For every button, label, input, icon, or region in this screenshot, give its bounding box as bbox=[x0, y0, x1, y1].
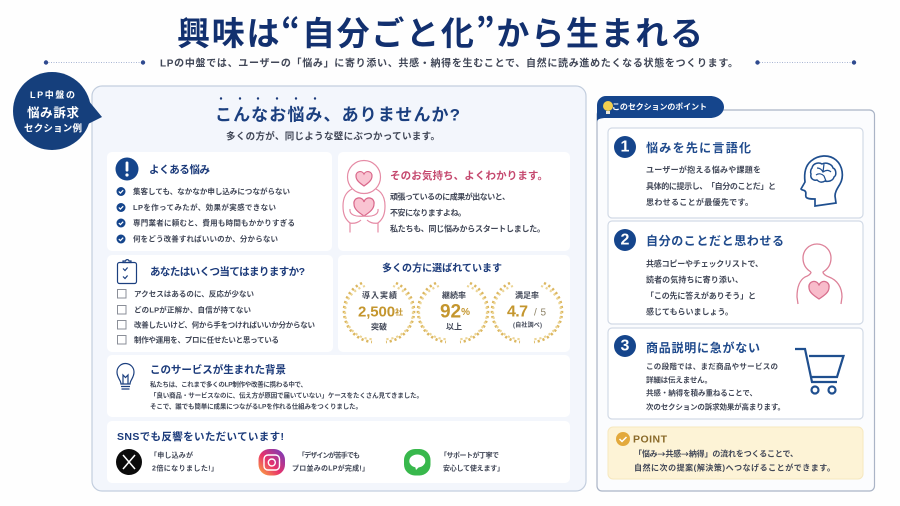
checklist: LPを作ってみたが、効果が実感できない bbox=[133, 202, 276, 212]
text 2: 感じてもらいましょう。 bbox=[646, 306, 733, 316]
icon: Instagram bbox=[258, 449, 285, 476]
number 1: 1 bbox=[621, 138, 630, 156]
icon: person with heart bbox=[797, 244, 842, 304]
checklist: 何をどう改善すればいいのか、分からない bbox=[133, 234, 278, 244]
number 3 bbox=[614, 335, 636, 357]
POINT label: POINT bbox=[633, 434, 668, 446]
heading: empathy: そのお気持ち、よくわかります。 bbox=[390, 169, 548, 182]
quote: X: 「申し込みが bbox=[150, 450, 193, 460]
quote: LINE: 「サポートが丁寧で bbox=[440, 450, 499, 460]
heading: SNS reactions: SNSでも反響をいただいています! bbox=[117, 430, 284, 443]
point card 1 bbox=[608, 128, 863, 218]
text: empathy body: 頑張っているのに成果が出ないと、 bbox=[390, 192, 510, 202]
card: common worries bbox=[107, 152, 332, 251]
badge: section example: LP中盤の bbox=[30, 89, 75, 100]
quote: X bbox=[150, 450, 218, 472]
text 1 bbox=[646, 164, 776, 207]
checkbox list bbox=[118, 288, 316, 344]
text 3: 次のセクションの訴求効果が高まります。 bbox=[646, 402, 785, 412]
left dotted ornament bbox=[44, 60, 145, 65]
checkbox list: 改善したいけど、何から手をつければいいか分からない bbox=[134, 320, 316, 330]
badge: 92% retention: 以上 bbox=[446, 322, 462, 332]
text: POINT bbox=[634, 448, 835, 472]
section heading: こんなお悩み、ありませんか? bbox=[215, 106, 460, 124]
badge: 4.7/5 satisfaction: 4.7 bbox=[507, 304, 528, 320]
text: service background body: そこで、誰でも簡単に成果につながるLPを作れる仕組みをつくりました。 bbox=[150, 402, 362, 410]
quote: Instagram bbox=[292, 450, 369, 472]
emphasis dots bbox=[220, 97, 316, 100]
icon: LINE bbox=[404, 449, 430, 476]
number 3: 3 bbox=[621, 338, 630, 354]
text 2: 読者の気持ちに寄り添い、 bbox=[646, 274, 743, 284]
badge: 2,500 installations bbox=[344, 283, 414, 342]
quote: Instagram: プロ並みのLPが完成!」 bbox=[292, 464, 369, 472]
tab label: このセクションのポイント bbox=[612, 102, 707, 112]
heading 1: 悩みを先に言語化 bbox=[646, 140, 751, 155]
card: empathy bbox=[338, 152, 570, 251]
text: POINT: 「悩み→共感→納得」の流れをつくることで、 bbox=[634, 448, 798, 460]
text 3: この段階では、まだ商品やサービスの bbox=[646, 361, 778, 371]
card: social proof bbox=[338, 255, 570, 352]
checklist: 専門業者に頼むと、費用も時間もかかりすぎる bbox=[133, 218, 295, 228]
text 2: 共感コピーやチェックリストで、 bbox=[646, 258, 763, 268]
number 2: 2 bbox=[621, 232, 630, 248]
quote: Instagram: 「デザインが苦手でも bbox=[298, 450, 360, 460]
text 3 bbox=[646, 361, 785, 412]
checklist bbox=[116, 186, 295, 244]
quote: LINE: 安心して使えます」 bbox=[443, 464, 504, 472]
heading: social proof: 多くの方に選ばれています bbox=[382, 262, 502, 274]
icon: exclamation bbox=[116, 158, 138, 180]
heading: self check: あなたはいくつ当てはまりますか? bbox=[150, 265, 305, 278]
panel: pain-point section example bbox=[92, 86, 586, 491]
text: empathy body: 不安になりますよね。 bbox=[390, 208, 466, 218]
text: service background body bbox=[150, 380, 423, 410]
badge: section example: 悩み訴求 bbox=[27, 105, 79, 120]
text 1: 具体的に提示し、「自分のことだ」と bbox=[646, 181, 776, 191]
icon: small bulb bbox=[603, 101, 613, 114]
text 3: 詳細は伝えません。 bbox=[646, 374, 712, 384]
icon: light bulb bbox=[117, 364, 134, 389]
badge: 92% retention: 92% bbox=[440, 302, 470, 322]
badge: 92% retention bbox=[418, 283, 488, 342]
text: empathy body: 私たちも、同じ悩みからスタートしました。 bbox=[390, 224, 545, 234]
badge: 4.7/5 satisfaction: (自社調べ) bbox=[513, 321, 542, 329]
text 1: 思わせることが最優先です。 bbox=[646, 197, 753, 207]
tab: section points bbox=[597, 96, 724, 122]
badge: 4.7/5 satisfaction bbox=[492, 283, 562, 342]
card: self check bbox=[107, 255, 333, 352]
icon: X bbox=[116, 449, 142, 475]
text 2 bbox=[646, 258, 763, 316]
number 2 bbox=[614, 229, 636, 251]
badge: 2,500 installations: 突破 bbox=[371, 322, 387, 332]
text 2: 「この先に答えがありそう」と bbox=[646, 290, 756, 300]
right dotted ornament bbox=[755, 60, 856, 65]
text: POINT: 自然に次の提案(解決策)へつなげることができます。 bbox=[634, 462, 835, 472]
icon: person with hearts bbox=[343, 160, 385, 232]
card: service background bbox=[107, 355, 570, 417]
number 1 bbox=[614, 136, 636, 158]
badge: 2,500 installations: 2,500社 bbox=[358, 304, 403, 320]
icon: shopping cart bbox=[795, 349, 844, 394]
text: empathy body bbox=[390, 192, 545, 234]
icon: clipboard bbox=[118, 260, 136, 284]
checkbox list: アクセスはあるのに、反応が少ない bbox=[134, 288, 254, 298]
badge: 2,500 installations: 導入実績 bbox=[362, 290, 397, 300]
text 1: ユーザーが抱える悩みや課題を bbox=[646, 164, 761, 174]
title: 興味は“自分ごと化”から生まれる bbox=[177, 7, 703, 55]
point card 2 bbox=[608, 221, 863, 324]
badge: 92% retention: 継続率 bbox=[442, 290, 466, 300]
panel: section points bbox=[597, 96, 874, 491]
heading: service background: このサービスが生まれた背景 bbox=[150, 363, 286, 376]
heading 3: 商品説明に急がない bbox=[646, 340, 760, 355]
subtitle: LPの中盤では、ユーザーの「悩み」に寄り添い、共感・納得を生むことで、自然に読み進めたくなる状態をつくります。 bbox=[160, 56, 738, 70]
checkbox list: 制作や運用を、プロに任せたいと思っている bbox=[134, 334, 279, 344]
card: SNS reactions bbox=[107, 421, 570, 483]
badge: section example bbox=[13, 72, 102, 150]
point card 3 bbox=[608, 328, 863, 419]
checkbox list: どのLPが正解か、自信が持てない bbox=[134, 304, 252, 314]
quote: LINE bbox=[440, 450, 504, 472]
text: service background body: 「良い商品・サービスなのに、伝え方が原因で届いていない」ケースをたくさん見てきました。 bbox=[150, 390, 423, 400]
quote: X: 2倍になりました!」 bbox=[152, 464, 218, 472]
callout: POINT bbox=[608, 427, 863, 479]
text: service background body: 私たちは、これまで多くのLP制作や改善に携わる中で、 bbox=[150, 380, 307, 388]
heading: common worries: よくある悩み bbox=[149, 163, 210, 176]
badge: 4.7/5 satisfaction: /5 bbox=[534, 308, 546, 318]
text 3: 共感・納得を積み重ねることで、 bbox=[646, 388, 757, 398]
heading 2: 自分のことだと思わせる bbox=[646, 233, 784, 248]
badge: 4.7/5 satisfaction: 満足率 bbox=[515, 290, 539, 300]
icon: head with brain bbox=[801, 156, 842, 206]
badge: section example: セクション例 bbox=[24, 122, 82, 134]
icon: check badge bbox=[616, 432, 630, 446]
checklist: 集客しても、なかなか申し込みにつながらない bbox=[133, 186, 290, 196]
section subheading: 多くの方が、同じような壁にぶつかっています。 bbox=[226, 130, 440, 142]
